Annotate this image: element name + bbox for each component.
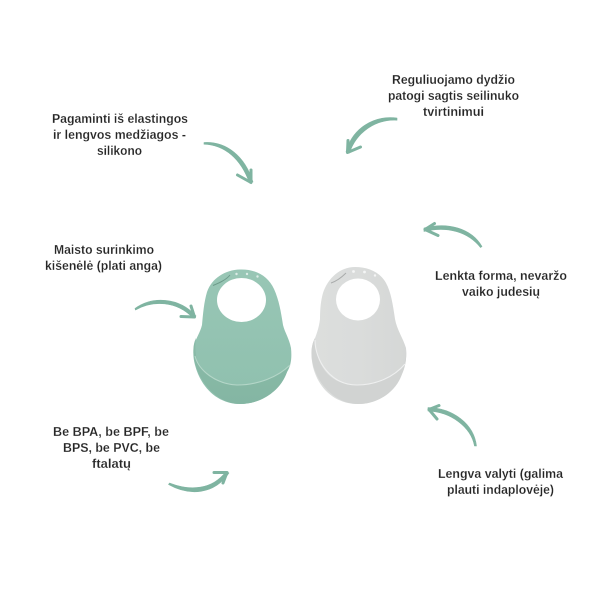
text: easy cleaning: Lengva valyti (galima <box>438 467 564 481</box>
text: chemical free <box>53 425 169 471</box>
green bib neck hole <box>217 278 266 322</box>
green bib body <box>193 269 291 404</box>
text: chemical free: Be BPA, be BPF, be <box>53 425 169 439</box>
text: adjustable clasp: patogi sagtis seilinuko <box>388 89 519 103</box>
text: adjustable clasp: Reguliuojamo dydžio <box>392 73 515 87</box>
text: food pocket: Maisto surinkimo <box>54 243 154 257</box>
arrow: silicone material <box>204 142 253 183</box>
green bib pocket rim <box>195 356 290 385</box>
text: silicone material <box>52 112 188 158</box>
text: food pocket: kišenėlė (plati anga) <box>45 259 162 273</box>
text: curved shape: Lenkta forma, nevaržo <box>435 269 567 283</box>
arrow: easy cleaning <box>428 406 476 446</box>
text: silicone material: Pagaminti iš elastingos <box>52 112 188 126</box>
text: curved shape <box>435 269 567 299</box>
grey bib clasp holes <box>352 270 376 277</box>
arrow: curved shape <box>424 224 482 248</box>
grey bib <box>311 267 406 404</box>
arrow: food pocket <box>135 300 196 318</box>
text: adjustable clasp <box>388 73 519 119</box>
text: adjustable clasp: tvirtinimui <box>423 105 484 119</box>
grey bib pocket <box>311 338 406 404</box>
arrow: adjustable clasp <box>346 118 397 153</box>
text: food pocket <box>45 243 162 273</box>
text: chemical free: ftalatų <box>92 457 131 471</box>
text: curved shape: vaiko judesių <box>462 285 540 299</box>
grey bib neck hole <box>336 278 380 320</box>
text: silicone material: silikono <box>97 144 142 158</box>
text: silicone material: ir lengvos medžiagos - <box>53 128 186 142</box>
green bib <box>193 269 291 404</box>
green bib clasp holes <box>235 273 259 278</box>
green bib clasp <box>213 275 230 286</box>
text: easy cleaning <box>438 467 564 497</box>
arrow: chemical free <box>168 472 229 492</box>
grey bib body <box>312 267 406 404</box>
grey bib pocket rim <box>315 340 405 385</box>
green bib pocket <box>193 338 291 404</box>
text: chemical free: BPS, be PVC, be <box>63 441 160 455</box>
grey bib clasp <box>331 273 346 283</box>
text: easy cleaning: plauti indaplovėje) <box>447 483 554 497</box>
